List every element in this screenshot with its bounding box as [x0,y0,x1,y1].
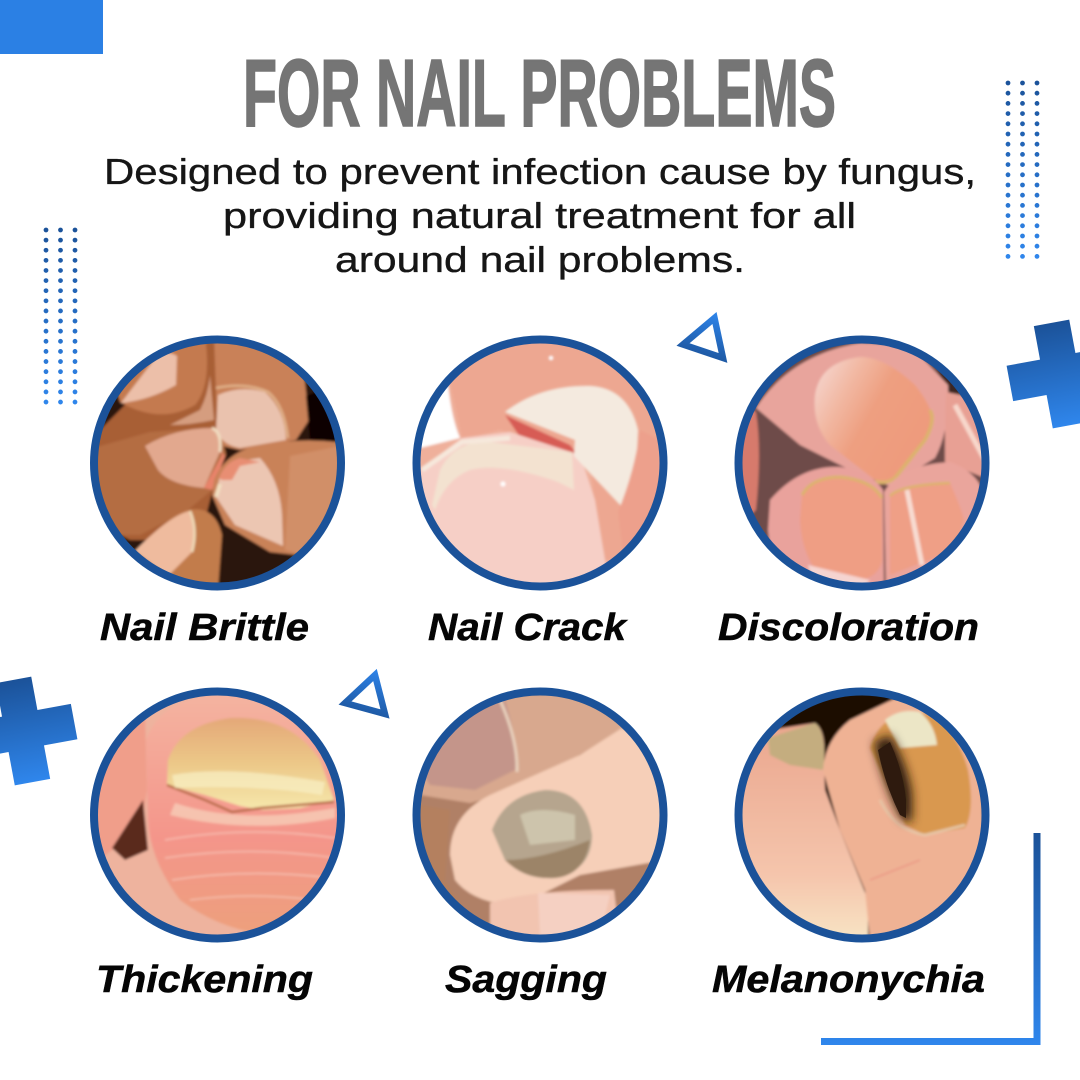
subtitle text block [104,151,976,280]
ring [738,692,986,938]
label: Nail Crack [428,607,628,649]
ring [416,692,664,938]
panel: Sagging [412,688,667,1001]
panel: Melanonychia [712,688,990,1001]
decorative corner block [0,0,103,54]
subtitle text block: providing natural treatment for all [223,195,856,236]
label: Discoloration [718,607,979,649]
ring [738,340,986,586]
ring [94,692,341,938]
subtitle text block: Designed to prevent infection cause by fungus, [104,151,976,192]
ring [94,340,341,586]
corner bracket bottom right [821,833,1037,1042]
icon: plus left [0,670,84,792]
icon: triangle lower [345,675,385,714]
panel: Nail Brittle [90,336,345,649]
photo: discoloured nail [742,344,982,582]
photo: brittle nails [98,344,337,582]
icon: triangle upper [683,318,723,358]
photo: sagging nail [420,696,660,934]
label: Thickening [96,959,313,1001]
dot grid left [46,230,75,403]
icon: plus right [1000,313,1080,435]
panel: Discoloration [718,336,990,649]
ring [416,340,664,586]
label: Nail Brittle [100,607,309,649]
label: Melanonychia [712,959,985,1001]
label: Sagging [445,959,607,1001]
dot grid right [1008,83,1037,258]
panel: Nail Crack [412,336,667,649]
subtitle text block: around nail problems. [335,239,745,280]
photo: dark-streaked nail [742,696,982,934]
panel: Thickening [90,688,345,1001]
photo: thickened nail [98,696,337,934]
photo: cracked nail [420,344,660,582]
